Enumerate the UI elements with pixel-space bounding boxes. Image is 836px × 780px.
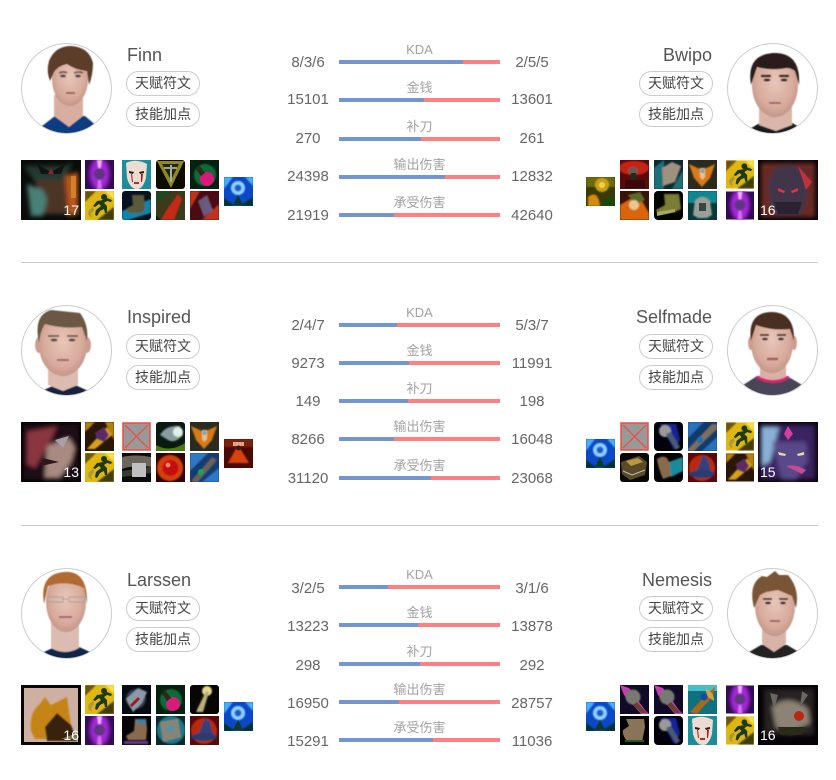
spell: flash (85, 453, 114, 482)
button: runes (126, 71, 200, 96)
item: red blade (156, 191, 185, 220)
item: hat (190, 716, 219, 745)
stat: gold: 金钱 (406, 343, 432, 358)
spell: teleport (85, 716, 114, 745)
trinket: blue (224, 702, 253, 731)
spell: exhaust (726, 453, 754, 482)
stat: gold: 13878 (511, 618, 553, 635)
button: skills (639, 365, 713, 390)
stat: KDA: KDA (406, 305, 433, 320)
stat: gold (278, 602, 562, 636)
stat: damage dealt: 28757 (511, 695, 553, 712)
button: skills: 技能加点 (648, 106, 704, 122)
item: green boots (654, 191, 683, 220)
stat: damage taken: 承受伤害 (393, 720, 446, 735)
player panel: Finn (21, 43, 253, 220)
stat: KDA: 8/3/6 (291, 54, 325, 71)
champion icon, level 16 (21, 685, 81, 745)
stat: damage taken: 31120 (288, 470, 328, 487)
stat: damage dealt (278, 679, 562, 713)
item: claw (156, 422, 185, 451)
stat: damage dealt: 16048 (511, 431, 553, 448)
item: red orb (156, 453, 185, 482)
stat: creep score: 292 (519, 657, 545, 674)
stat: KDA: 2/4/7 (291, 317, 325, 334)
button: runes (639, 596, 713, 621)
stat: gold (291, 343, 552, 372)
stat: KDA: KDA (406, 567, 433, 582)
stat: damage taken (287, 195, 553, 224)
item: potion (190, 160, 219, 189)
item: boots (620, 716, 649, 745)
avatar: Nemesis (727, 568, 818, 659)
player name: Inspired (127, 307, 191, 327)
item: gauntlet (190, 191, 219, 220)
divider (21, 525, 818, 526)
avatar: Inspired (21, 305, 112, 396)
item: sword (190, 685, 219, 714)
stat: damage dealt (287, 157, 553, 185)
button: runes: 天赋符文 (135, 338, 191, 354)
stat: gold: 13601 (511, 91, 553, 108)
button: skills (126, 365, 200, 390)
item: eagle (190, 422, 219, 451)
avatar: Larssen (21, 568, 112, 659)
stat: damage dealt: 输出伤害 (393, 419, 446, 434)
item: boots (122, 191, 151, 220)
spell: flash (85, 191, 114, 220)
stat: gold: 15101 (287, 91, 329, 108)
spell: flash (726, 716, 754, 745)
stats panel: Inspired vs Selfmade (288, 305, 553, 487)
stat: damage dealt: 12832 (511, 168, 553, 185)
stat: creep score: 149 (295, 393, 321, 410)
item: wand (654, 716, 683, 745)
player name: Larssen (127, 570, 191, 590)
item: fire orb (620, 191, 649, 220)
item: staff (688, 685, 717, 714)
stat: damage dealt: 16950 (287, 695, 329, 712)
stat: damage taken: 11036 (512, 733, 552, 750)
button: skills (639, 627, 713, 652)
champion icon, level 16: 16 (63, 727, 79, 743)
trinket: red (224, 439, 253, 468)
stat: damage dealt: 24398 (287, 168, 329, 185)
stat: damage dealt: 输出伤害 (393, 157, 446, 172)
stat: creep score (295, 119, 545, 147)
button: skills: 技能加点 (135, 631, 191, 647)
stats panel: Larssen vs Nemesis (278, 565, 562, 745)
spell: teleport (726, 685, 754, 714)
item: missing image (620, 422, 649, 451)
stat: KDA (291, 42, 549, 71)
item: mushroom (620, 160, 649, 189)
stat: gold: 9273 (291, 355, 325, 372)
stat: KDA: 3/1/6 (515, 580, 549, 597)
champion icon, level 15: 15 (760, 464, 776, 480)
item: boots (122, 716, 151, 745)
stat: gold: 金钱 (406, 80, 432, 95)
item: helmet (688, 191, 717, 220)
stat: KDA (278, 564, 562, 598)
player name: Nemesis (642, 570, 712, 590)
button: runes (126, 334, 200, 359)
stat: gold (287, 80, 553, 108)
item: eagle (688, 160, 717, 189)
champion icon, level 16: 16 (760, 727, 776, 743)
avatar: Selfmade (727, 305, 818, 396)
stat: damage dealt (278, 416, 562, 450)
button: skills: 技能加点 (135, 106, 191, 122)
champion icon, level 15 (758, 422, 818, 482)
avatar: Bwipo (727, 43, 818, 134)
stat: gold: 11991 (512, 355, 552, 372)
spell: exhaust (85, 422, 114, 451)
stat: creep score: 补刀 (406, 644, 432, 659)
item: blue blade (688, 422, 717, 451)
button: skills (639, 102, 713, 127)
champion icon, level 17 (21, 160, 81, 220)
item: mask (122, 160, 151, 189)
item: book (620, 453, 649, 482)
item: missing image (122, 422, 151, 451)
spell: flash (85, 685, 114, 714)
button: skills (126, 627, 200, 652)
stat: damage dealt: 8266 (291, 431, 325, 448)
avatar: Finn (21, 43, 112, 134)
button: runes (639, 71, 713, 96)
champion icon, level 13 (21, 422, 81, 482)
stats panel: Finn vs Bwipo (287, 42, 553, 224)
champion icon, level 13: 13 (63, 464, 79, 480)
stat: creep score: 261 (519, 130, 545, 147)
spell: teleport (85, 160, 114, 189)
stat: creep score (278, 641, 562, 675)
stat: damage taken: 15291 (287, 733, 329, 750)
item: potion (156, 685, 185, 714)
trinket: blue (224, 177, 253, 206)
button: skills (126, 102, 200, 127)
stat: creep score: 补刀 (406, 381, 432, 396)
champion icon, level 16 (758, 160, 818, 220)
stat: creep score: 198 (519, 393, 545, 410)
player panel: Nemesis (586, 568, 818, 745)
player panel: Bwipo (586, 43, 818, 220)
stat: creep score: 补刀 (406, 119, 432, 134)
stat: creep score: 298 (295, 657, 321, 674)
stat: damage taken: 承受伤害 (393, 458, 446, 473)
item: boots (654, 453, 683, 482)
button: runes: 天赋符文 (648, 75, 704, 91)
item: mask (688, 716, 717, 745)
item: belt (122, 453, 151, 482)
stat: KDA: 3/2/5 (291, 580, 325, 597)
player name: Bwipo (663, 45, 712, 65)
item: scroll (156, 716, 185, 745)
trinket: blue (586, 439, 615, 468)
stat: KDA: 2/5/5 (515, 54, 549, 71)
item: pink wand (654, 685, 683, 714)
button: runes (639, 334, 713, 359)
divider (21, 262, 818, 263)
stat: gold: 13223 (287, 618, 329, 635)
stat: damage taken: 承受伤害 (393, 195, 446, 210)
item: wand (654, 422, 683, 451)
champion icon, level 17: 17 (63, 202, 79, 218)
stat: creep score (295, 381, 545, 410)
spell: teleport (726, 191, 754, 220)
button: runes: 天赋符文 (648, 338, 704, 354)
item: teal armor (654, 160, 683, 189)
item: pink wand (620, 685, 649, 714)
stat: damage taken: 42640 (511, 207, 553, 224)
player panel: Inspired (21, 305, 253, 482)
stat: damage taken: 23068 (511, 470, 553, 487)
item: axe (122, 685, 151, 714)
button: runes: 天赋符文 (135, 600, 191, 616)
stat: KDA: KDA (406, 42, 433, 57)
stat: damage taken: 21919 (287, 207, 329, 224)
item: sapphire blade (190, 453, 219, 482)
stat: creep score: 270 (295, 130, 321, 147)
player name: Selfmade (636, 307, 712, 327)
champion icon, level 16 (758, 685, 818, 745)
player panel: Larssen (21, 568, 253, 745)
button: runes: 天赋符文 (135, 75, 191, 91)
spell: flash (726, 422, 754, 451)
stat: damage taken (278, 455, 562, 489)
item: triangle (156, 160, 185, 189)
stat: gold: 金钱 (406, 605, 432, 620)
player name: Finn (127, 45, 162, 65)
champion icon, level 16: 16 (760, 202, 776, 218)
trinket: blue (586, 702, 615, 731)
stat: damage taken (278, 717, 562, 751)
button: skills: 技能加点 (648, 631, 704, 647)
stat: damage dealt: 输出伤害 (393, 682, 446, 697)
spell: flash (726, 160, 754, 189)
stat: KDA: 5/3/7 (515, 317, 549, 334)
button: skills: 技能加点 (135, 369, 191, 385)
trinket: flower (586, 177, 615, 206)
item: hat (688, 453, 717, 482)
button: runes (126, 596, 200, 621)
button: runes: 天赋符文 (648, 600, 704, 616)
button: skills: 技能加点 (648, 369, 704, 385)
player panel: Selfmade (586, 305, 818, 482)
stat: KDA (291, 305, 549, 334)
